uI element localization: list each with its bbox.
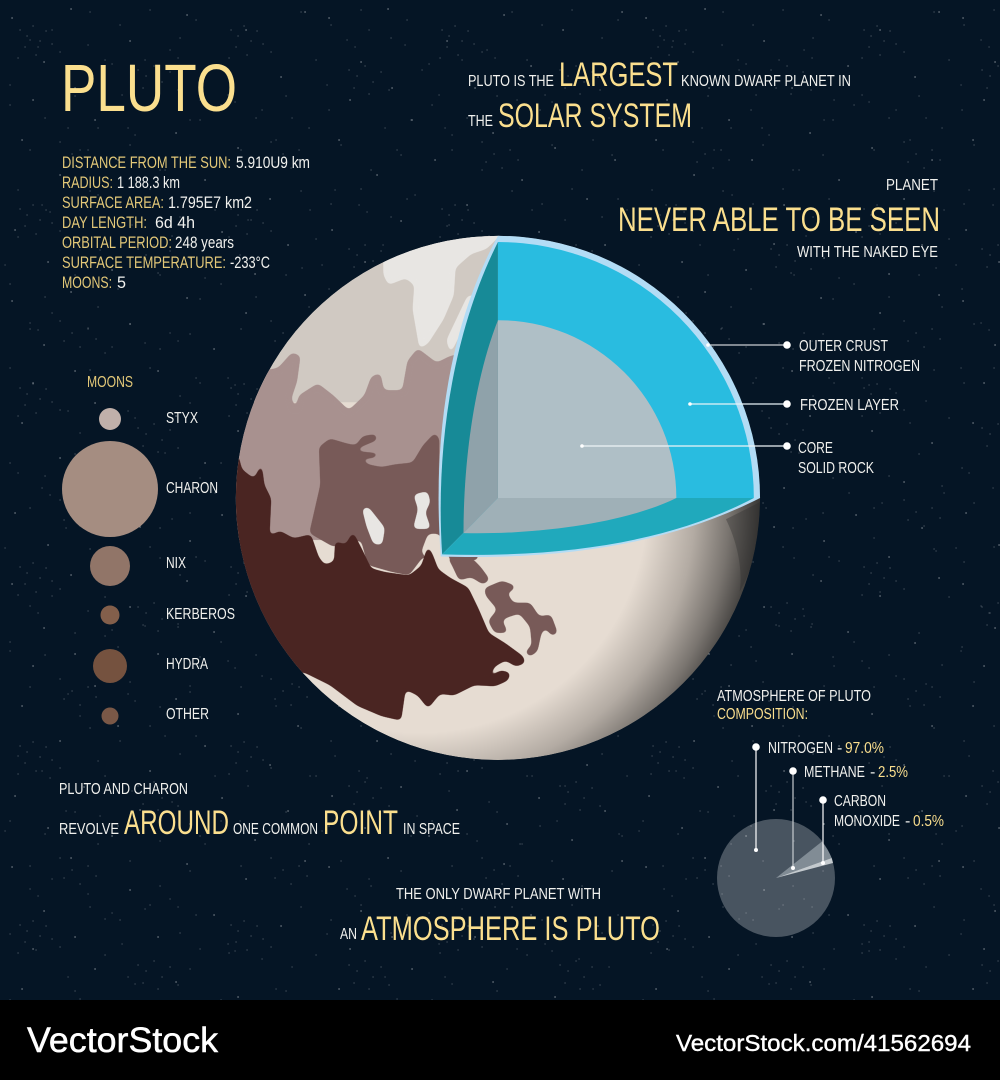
moon: Kerberos: KERBEROS <box>166 606 235 623</box>
nitrogen label: NITROGEN <box>768 740 833 757</box>
headline: largest dwarf planet: KNOWN DWARF PLANET IN <box>681 73 851 90</box>
frozen layer left face <box>441 242 498 554</box>
callout: outer crust: FROZEN NITROGEN <box>799 358 920 375</box>
headline: never able to be seen: PLANET <box>886 177 938 194</box>
planet facts list: 6d 4h <box>155 213 195 232</box>
planet facts list: 248 years <box>175 233 234 252</box>
callout: frozen layer <box>688 397 899 414</box>
nitrogen label: 97.0% <box>845 740 884 757</box>
callout: outer crust: OUTER CRUST <box>799 338 888 355</box>
planet facts list: SURFACE AREA: <box>62 193 164 212</box>
planet facts list: 5 <box>117 273 126 292</box>
callout: core: SOLID ROCK <box>798 460 874 477</box>
headline: Pluto and Charon: IN SPACE <box>403 821 460 838</box>
headline: only dwarf planet with atmosphere: AN <box>340 926 357 943</box>
planet facts list: 1.795E7 km2 <box>168 193 252 212</box>
methane label: - <box>870 764 875 781</box>
watermark band: VectorStock.com/41562694 <box>676 1030 971 1056</box>
planet facts list: 1 188.3 km <box>117 173 180 192</box>
methane label: 2.5% <box>878 764 908 781</box>
title: PLUTO <box>61 51 237 126</box>
planet facts list: SURFACE TEMPERATURE: <box>62 253 226 272</box>
headline: only dwarf planet with atmosphere: THE ONLY DWARF PLANET WITH <box>396 886 601 903</box>
moon: Nix: NIX <box>166 555 186 572</box>
moon: other: OTHER <box>166 706 209 723</box>
moon: other <box>102 706 209 724</box>
headline: only dwarf planet with atmosphere <box>340 886 660 948</box>
carbon monoxide label: CARBON <box>834 793 886 810</box>
headline: largest dwarf planet: LARGEST <box>559 56 678 94</box>
headline: largest dwarf planet: THE <box>468 113 493 130</box>
carbon monoxide label: 0.5% <box>913 813 944 830</box>
headline: only dwarf planet with atmosphere: ATMOSPHERE IS PLUTO <box>361 910 660 948</box>
carbon monoxide label <box>819 793 944 865</box>
methane label <box>789 764 908 870</box>
headline: largest dwarf planet: PLUTO IS THE <box>468 73 554 90</box>
core left face <box>464 320 498 533</box>
moons panel <box>62 374 235 724</box>
planet facts list: DISTANCE FROM THE SUN: <box>62 153 231 172</box>
headline: largest dwarf planet <box>468 56 851 135</box>
core back wall <box>498 320 676 498</box>
watermark band <box>0 1000 1000 1080</box>
headline: never able to be seen <box>618 177 940 261</box>
moon: Hydra <box>93 649 208 683</box>
core bottom face <box>464 498 676 533</box>
methane label: METHANE <box>804 764 865 781</box>
planet facts list: -233°C <box>230 253 270 272</box>
planet facts list: RADIUS: <box>62 173 113 192</box>
planet facts list: 5.910U9 km <box>236 153 310 172</box>
surface regions <box>223 227 760 760</box>
planet facts list: ORBITAL PERIOD: <box>62 233 172 252</box>
carbon monoxide label: - <box>905 813 910 830</box>
planet facts list: DAY LENGTH: <box>62 213 147 232</box>
callout: core: CORE <box>798 440 833 457</box>
chart heading: ATMOSPHERE OF PLUTO <box>717 688 871 705</box>
moon: Charon <box>62 441 218 537</box>
planet cutaway illustration <box>223 227 760 760</box>
moon: Styx: STYX <box>166 410 198 427</box>
callout: frozen layer: FROZEN LAYER <box>800 397 899 414</box>
moon: Charon: CHARON <box>166 480 218 497</box>
carbon monoxide label: MONOXIDE <box>834 813 900 830</box>
headline: Pluto and Charon <box>59 781 460 842</box>
frozen layer back wall <box>498 242 754 498</box>
frozen layer bottom face <box>442 498 754 555</box>
moon: Styx <box>99 408 198 430</box>
headline: Pluto and Charon: AROUND <box>124 804 229 842</box>
planet facts list: MOONS: <box>62 273 112 292</box>
planet facts list <box>62 153 310 292</box>
headline: largest dwarf planet: SOLAR SYSTEM <box>498 97 692 135</box>
callout: core <box>580 440 874 477</box>
atmosphere composition chart <box>717 688 944 937</box>
headline: Pluto and Charon: POINT <box>323 804 398 842</box>
nitrogen label <box>752 740 884 852</box>
moons heading: MOONS <box>87 374 133 391</box>
headline: Pluto and Charon: REVOLVE <box>59 821 119 838</box>
headline: Pluto and Charon: ONE COMMON <box>233 821 318 838</box>
moon: Nix <box>90 546 186 586</box>
pie chart <box>717 819 835 937</box>
moon: Hydra: HYDRA <box>166 656 208 673</box>
watermark band: VectorStock <box>27 1021 219 1060</box>
callout: outer crust <box>706 338 920 375</box>
chart heading: COMPOSITION: <box>717 706 808 723</box>
nitrogen label: - <box>837 740 842 757</box>
chart heading <box>717 688 871 723</box>
moon: Kerberos <box>100 606 235 624</box>
crust rim <box>439 236 760 557</box>
headline: never able to be seen: WITH THE NAKED EYE <box>797 244 938 261</box>
headline: Pluto and Charon: PLUTO AND CHARON <box>59 781 188 798</box>
